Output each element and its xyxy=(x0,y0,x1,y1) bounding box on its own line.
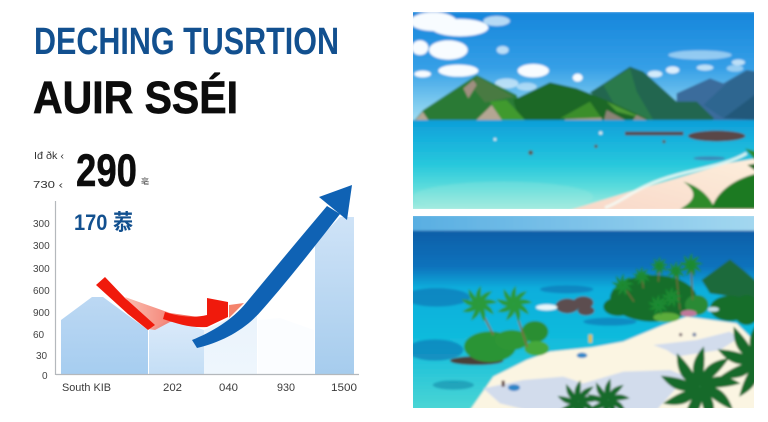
photo: mountain lagoon xyxy=(410,12,760,212)
x axis labels: 1500 xyxy=(331,382,357,394)
y axis labels: 300 xyxy=(33,219,50,230)
far vegetation xyxy=(603,275,760,325)
stat block: main figure: 730 ‹ xyxy=(33,180,63,191)
beach shadows xyxy=(483,332,738,410)
water shadow on shallows xyxy=(433,380,474,390)
water shadow xyxy=(693,156,725,160)
shore rocks xyxy=(414,105,651,124)
y axis labels: 600 xyxy=(33,286,50,297)
far mountains xyxy=(677,70,757,120)
y axis labels: 300 xyxy=(33,241,50,252)
chart area shapes xyxy=(61,217,354,374)
photo: tropical beach xyxy=(413,216,754,408)
beach xyxy=(470,317,757,410)
far hill xyxy=(702,259,757,300)
x axis labels: 040 xyxy=(219,382,238,394)
clouds xyxy=(410,12,745,91)
rock xyxy=(556,296,594,315)
y axis labels xyxy=(33,219,50,382)
arrow: blue upward trend xyxy=(192,185,352,348)
dark water shade xyxy=(403,285,637,361)
y axis labels: 0 xyxy=(42,371,48,382)
subtitle: AUIR SSÉI xyxy=(33,72,238,123)
beach xyxy=(570,158,757,210)
swimmers xyxy=(494,131,666,155)
sea xyxy=(410,231,760,411)
hut xyxy=(708,307,719,312)
x axis labels: South KIB xyxy=(62,382,111,394)
x axis labels: 202 xyxy=(163,382,182,394)
right mountain xyxy=(590,67,714,121)
y axis labels: 900 xyxy=(33,308,50,319)
y axis labels: 60 xyxy=(33,330,45,341)
sky xyxy=(410,215,760,231)
stat block: main figure: Iđ ðk ‹ xyxy=(34,150,64,162)
y axis labels: 30 xyxy=(36,351,48,362)
foam xyxy=(536,304,557,310)
shallow water glow xyxy=(414,181,592,200)
foreground palms xyxy=(556,318,768,422)
x axis labels xyxy=(62,382,357,394)
chart axes xyxy=(56,201,359,375)
palm fronds xyxy=(680,148,757,209)
x axis labels: 930 xyxy=(277,382,295,394)
sky xyxy=(410,12,760,123)
title: DECHING TUSRTION xyxy=(34,21,339,63)
beach figures xyxy=(502,333,696,391)
arrow: red downward trend xyxy=(96,277,244,330)
rock jetty xyxy=(625,131,745,141)
left mountain xyxy=(413,75,525,122)
sea xyxy=(410,120,760,210)
wave foam xyxy=(605,153,747,208)
umbrella xyxy=(681,310,697,317)
stat block: main figure: 290 xyxy=(76,145,137,196)
stat block: secondary figure: 170 菾 xyxy=(74,210,133,235)
stat block: main figure xyxy=(33,145,149,196)
stat block: main figure: 亳 xyxy=(141,176,149,186)
middle mountain xyxy=(513,82,651,122)
chart xyxy=(33,185,359,394)
small island with palms xyxy=(450,285,549,365)
y axis labels: 300 xyxy=(33,264,50,275)
palms far xyxy=(623,265,693,310)
